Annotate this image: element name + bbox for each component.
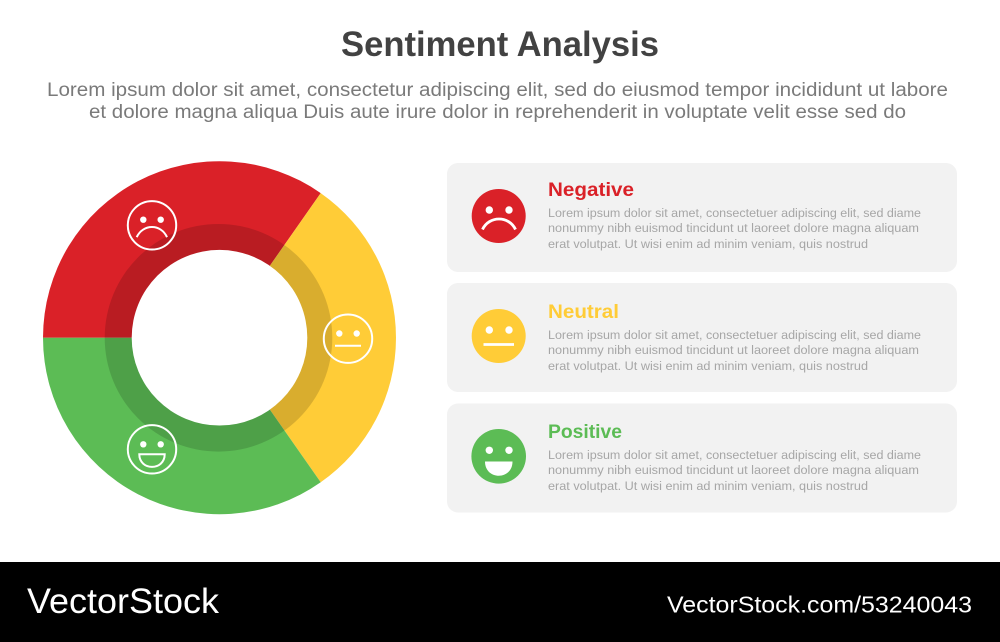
inner shadow ring [105, 224, 332, 452]
body text: neutral: Lorem ipsum dolor sit amet, consectetuer adipiscing elit, sed diame [548, 328, 921, 342]
icon: neutral outline face [324, 314, 372, 363]
icon: negative face [472, 189, 526, 243]
heading: positive: Positive [548, 422, 622, 443]
footer url text: VectorStock.com/53240043 [667, 592, 972, 618]
body text: negative: nonummy nibh euismod tincidunt ut laoreet dolore magna aliquam [548, 221, 919, 235]
footer logo text: VectorStock [27, 582, 220, 621]
icon: negative outline face [128, 201, 176, 250]
body text: negative: Lorem ipsum dolor sit amet, consectetuer adipiscing elit, sed diame [548, 206, 921, 220]
footer bar [0, 562, 1000, 642]
subtitle text: Lorem ipsum dolor sit amet, consectetur adipiscing elit, sed do eiusmod tempor incididunt ut labore [47, 80, 948, 101]
icon: neutral face [472, 309, 526, 363]
body text: neutral: nonummy nibh euismod tincidunt ut laoreet dolore magna aliquam [548, 343, 919, 357]
body text: neutral: erat volutpat. Ut wisi enim ad minim veniam, quis nostrud [548, 359, 868, 373]
panel: neutral [447, 283, 957, 392]
donut chart [43, 161, 396, 514]
heading: neutral: Neutral [548, 302, 619, 323]
center hole [132, 250, 307, 426]
subtitle text: et dolore magna aliqua Duis aute irure dolor in reprehenderit in voluptate velit esse sed do [89, 102, 906, 123]
icon: positive outline face [128, 425, 176, 473]
body text: positive [548, 448, 921, 493]
panel: positive [447, 404, 957, 512]
body text: negative [548, 206, 921, 251]
subtitle text [47, 80, 948, 123]
icon: positive face [471, 429, 526, 484]
segment: neutral [220, 193, 396, 482]
body text: neutral [548, 328, 921, 373]
heading: negative: Negative [548, 180, 634, 201]
panel: negative [447, 163, 957, 272]
body text: positive: Lorem ipsum dolor sit amet, consectetuer adipiscing elit, sed diame [548, 448, 921, 462]
body text: positive: nonummy nibh euismod tincidunt ut laoreet dolore magna aliquam [548, 463, 919, 477]
body text: negative: erat volutpat. Ut wisi enim ad minim veniam, quis nostrud [548, 237, 868, 251]
segment: negative [43, 161, 321, 338]
body text: positive: erat volutpat. Ut wisi enim ad minim veniam, quis nostrud [548, 479, 868, 493]
title: Sentiment Analysis [341, 25, 659, 64]
segment: positive [43, 338, 321, 514]
